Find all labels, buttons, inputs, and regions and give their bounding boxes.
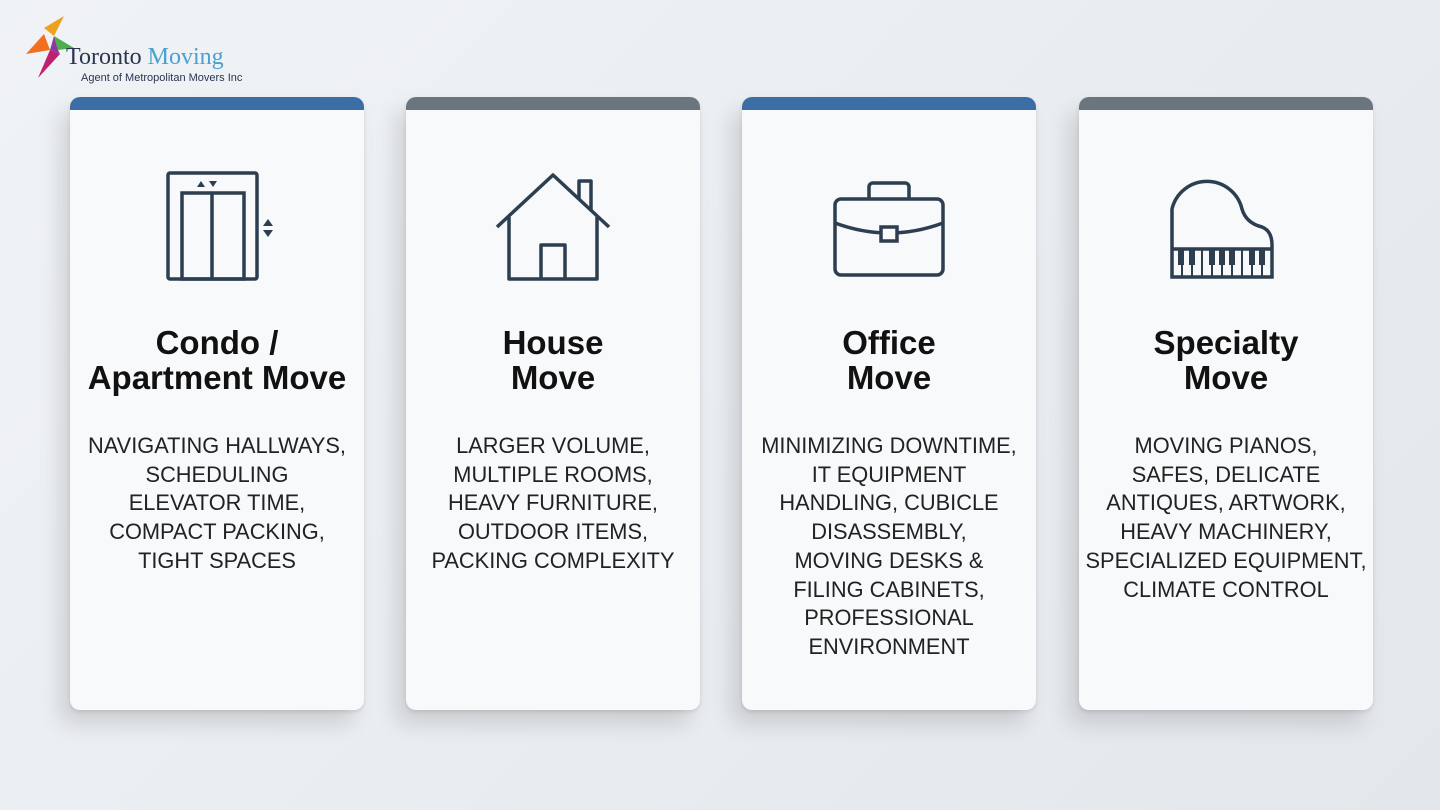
text <box>88 433 346 573</box>
title <box>1154 324 1298 396</box>
text <box>1086 433 1366 602</box>
text: SCHEDULING <box>146 462 288 487</box>
icon: house <box>496 173 610 281</box>
text: MINIMIZING DOWNTIME, <box>761 433 1017 458</box>
text: TIGHT SPACES <box>138 548 296 573</box>
text: ELEVATOR TIME, <box>129 490 305 515</box>
text: LARGER VOLUME, <box>456 433 650 458</box>
logo <box>26 16 242 84</box>
text <box>761 433 1017 659</box>
title <box>842 324 936 396</box>
text: IT EQUIPMENT <box>812 462 966 487</box>
panel: specialty <box>1079 97 1373 710</box>
text: CLIMATE CONTROL <box>1123 577 1329 602</box>
title: Move <box>847 359 931 396</box>
tagline: Agent of Metropolitan Movers Inc <box>81 72 242 84</box>
text: MOVING PIANOS, <box>1135 433 1317 458</box>
text: HEAVY MACHINERY, <box>1120 519 1332 544</box>
text: HANDLING, CUBICLE <box>779 490 999 515</box>
text: NAVIGATING HALLWAYS, <box>88 433 346 458</box>
text: PACKING COMPLEXITY <box>431 548 675 573</box>
title <box>503 324 603 396</box>
text: ENVIRONMENT <box>808 634 970 659</box>
icon: logo mark <box>26 16 74 78</box>
text: MULTIPLE ROOMS, <box>453 462 653 487</box>
panel: office <box>742 97 1036 710</box>
text: SAFES, DELICATE <box>1132 462 1320 487</box>
title: Specialty <box>1154 324 1298 361</box>
text: ANTIQUES, ARTWORK, <box>1106 490 1346 515</box>
text: FILING CABINETS, <box>793 577 985 602</box>
title <box>88 324 346 396</box>
title: Move <box>511 359 595 396</box>
text: SPECIALIZED EQUIPMENT, <box>1086 548 1366 573</box>
title: Condo / <box>156 324 278 361</box>
text: MOVING DESKS & <box>795 548 983 573</box>
text: DISASSEMBLY, <box>811 519 967 544</box>
brand name: Toronto Moving <box>66 44 224 70</box>
icon: briefcase <box>833 181 945 277</box>
title: Office <box>842 324 936 361</box>
title: House <box>503 324 603 361</box>
text <box>431 433 675 573</box>
panel: house <box>406 97 700 710</box>
text: COMPACT PACKING, <box>109 519 325 544</box>
icon: elevator <box>166 171 273 281</box>
text: OUTDOOR ITEMS, <box>458 519 648 544</box>
title: Apartment Move <box>88 359 346 396</box>
text: HEAVY FURNITURE, <box>448 490 658 515</box>
text: PROFESSIONAL <box>804 605 974 630</box>
title: Move <box>1184 359 1268 396</box>
icon: piano <box>1170 180 1274 279</box>
panel: condo <box>70 97 364 710</box>
